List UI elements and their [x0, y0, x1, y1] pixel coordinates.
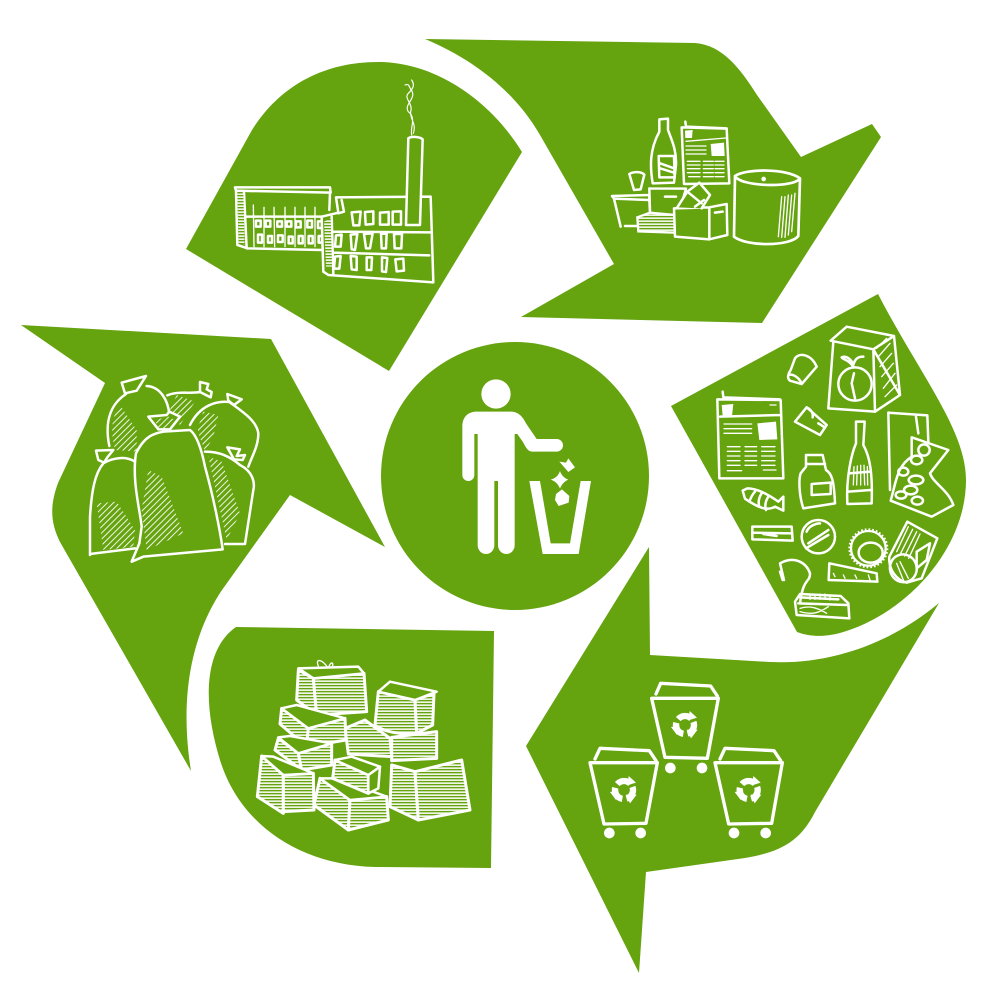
- panel: factory segment: [186, 62, 522, 371]
- back bags: [108, 376, 258, 467]
- bale G: [390, 760, 470, 820]
- panel: garbage bags arrow: [21, 325, 385, 771]
- candy wrapper: [743, 488, 783, 511]
- illustration: garbage bags: [90, 376, 258, 562]
- bale H: [345, 720, 392, 757]
- jar: [799, 455, 835, 508]
- sardine tin: [780, 560, 849, 618]
- bale E: [333, 757, 380, 793]
- cereal bag: [888, 413, 953, 517]
- food can: [886, 522, 937, 586]
- bale C: [275, 736, 332, 770]
- panel: consumer goods segment: [671, 294, 966, 636]
- cups: [788, 355, 817, 384]
- panel: products arrow: [425, 39, 881, 323]
- front bag: [132, 412, 223, 562]
- packet: [829, 563, 877, 582]
- left building: [235, 187, 331, 250]
- tub: [734, 171, 800, 244]
- tin lid: [802, 520, 835, 553]
- person: [462, 379, 563, 554]
- bale B: [280, 705, 346, 747]
- right lower bag: [205, 447, 254, 544]
- boxes: [612, 183, 727, 239]
- illustration: factory: [235, 80, 433, 282]
- smoke: [405, 80, 414, 135]
- panel: central circle: [381, 342, 649, 610]
- bottle: [651, 119, 676, 183]
- bale I: [392, 732, 437, 761]
- illustration: paper bales: [257, 661, 470, 830]
- bale J: [375, 682, 437, 734]
- illustration: products: [612, 119, 800, 244]
- bale A: [297, 667, 367, 715]
- wine bottle: [847, 422, 872, 504]
- cup: [629, 172, 644, 190]
- falling litter: [551, 458, 575, 506]
- opened can lid: [850, 530, 887, 567]
- illustration: consumer goods: [717, 327, 953, 618]
- illustration: recycling bins: [590, 683, 782, 838]
- leaflet: [682, 122, 729, 184]
- icon: litter person and bin: [462, 379, 591, 554]
- left front bag: [90, 450, 135, 555]
- bale D: [257, 756, 314, 813]
- left bin: [590, 748, 657, 838]
- panel: paper bales segment: [209, 627, 494, 868]
- bale F: [314, 778, 388, 830]
- right bin: [715, 748, 782, 838]
- right building: [322, 197, 433, 282]
- paper bag with apple: [828, 327, 900, 412]
- tape roll: [752, 527, 793, 541]
- panel: recycling bins arrow: [526, 547, 939, 973]
- middle bin: [652, 683, 718, 773]
- windows: [334, 211, 404, 272]
- trash bin: [529, 481, 591, 554]
- leaflet: [717, 392, 783, 478]
- chimney: [406, 137, 423, 225]
